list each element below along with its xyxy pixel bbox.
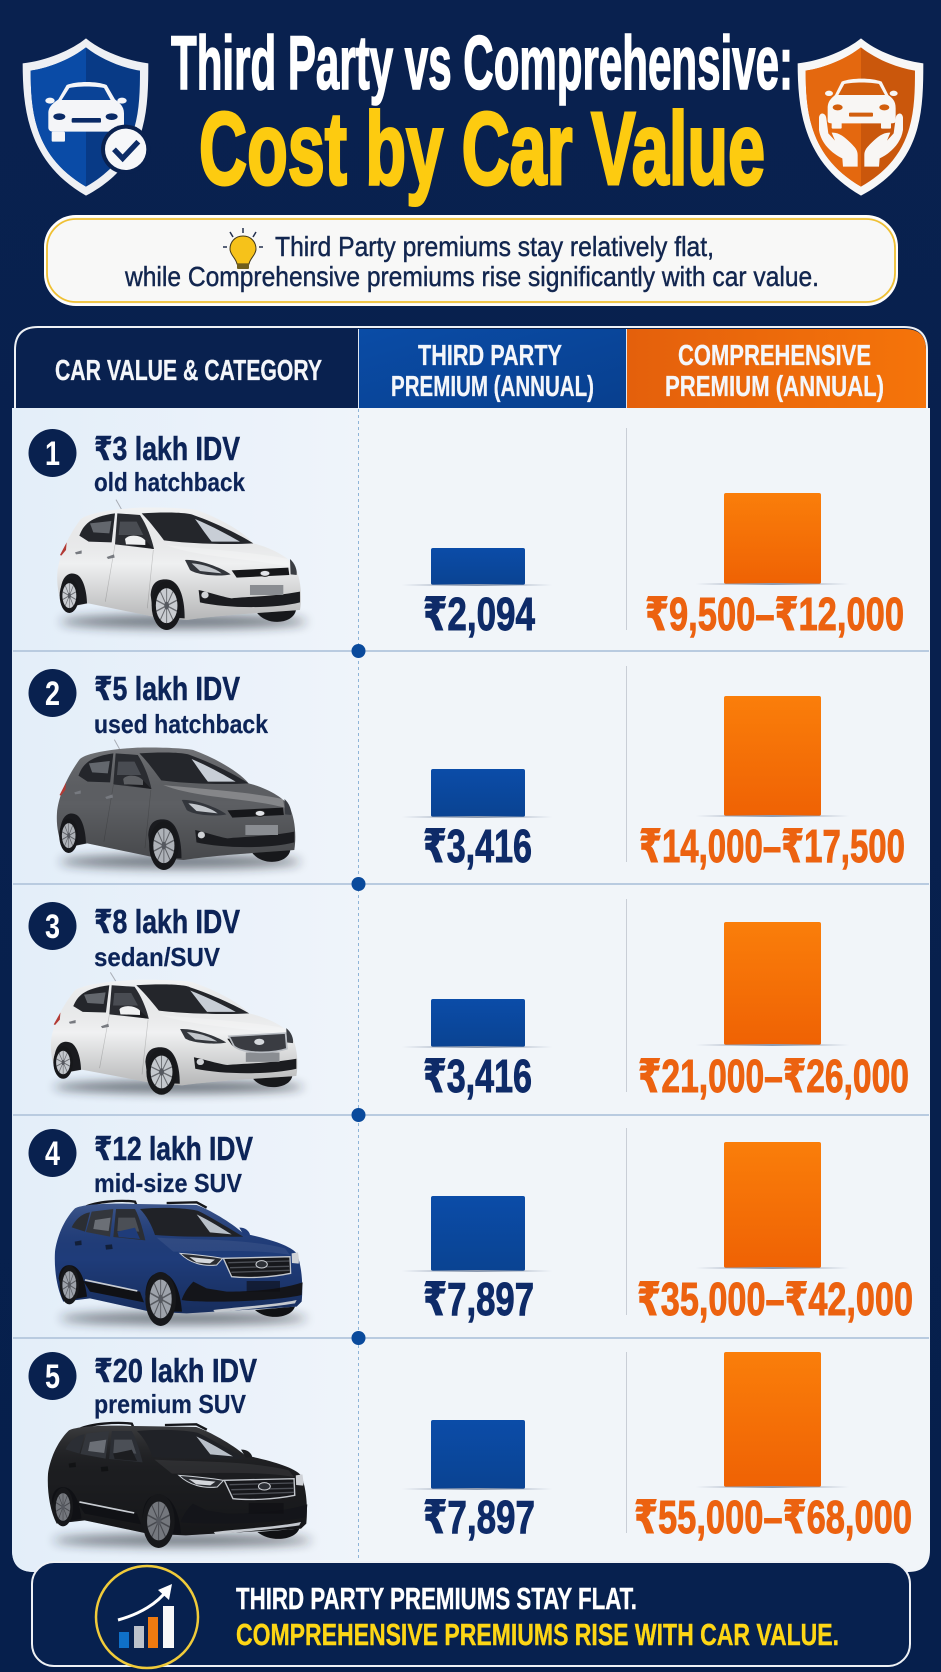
icon: rising bar chart xyxy=(96,1566,198,1668)
badge 1 xyxy=(28,429,76,477)
row 2 comprehensive bar xyxy=(724,696,821,816)
row 1 xyxy=(28,429,904,640)
row 2 category: used hatchback xyxy=(94,709,268,739)
row 5 xyxy=(28,1352,912,1548)
row 1 third party bar xyxy=(431,548,525,585)
row 5 third party amount: ₹7,897 xyxy=(423,1491,535,1543)
row 3 third party bar xyxy=(431,999,525,1047)
icon: orange shield with car and hands xyxy=(798,38,923,196)
row 5 third party bar xyxy=(431,1420,525,1489)
row 2 third party bar xyxy=(431,769,525,817)
badge 4: 4 xyxy=(45,1135,60,1173)
icon: blue shield with car and check xyxy=(23,38,150,196)
callout line 1: Third Party premiums stay relatively flat, xyxy=(275,231,714,262)
footer line 1: THIRD PARTY PREMIUMS STAY FLAT. xyxy=(236,1581,637,1616)
row 3 third party amount: ₹3,416 xyxy=(423,1050,532,1102)
callout line 2: while Comprehensive premiums rise significantly with car value. xyxy=(124,261,819,292)
row 4 value: ₹12 lakh IDV xyxy=(94,1130,253,1167)
row 3 category: sedan/SUV xyxy=(94,942,221,972)
icon: light bulb xyxy=(223,228,263,269)
row 5 value: ₹20 lakh IDV xyxy=(94,1352,257,1389)
header: third party premium: PREMIUM (ANNUAL) xyxy=(391,371,594,403)
badge 1: 1 xyxy=(45,435,60,473)
badge 4 xyxy=(28,1129,76,1177)
row 4 category: mid-size SUV xyxy=(94,1168,243,1198)
row 4 xyxy=(28,1129,913,1326)
row 3 xyxy=(28,902,909,1102)
callout xyxy=(45,216,897,305)
title xyxy=(171,21,793,206)
badge 2 xyxy=(28,669,76,717)
car: grey hatchback xyxy=(57,740,301,870)
row 3 value: ₹8 lakh IDV xyxy=(94,903,240,940)
car: white hatchback xyxy=(57,500,307,630)
row 1 value: ₹3 lakh IDV xyxy=(94,430,240,467)
table body panel xyxy=(12,408,930,1572)
badge 3 xyxy=(28,902,76,950)
row 2 value: ₹5 lakh IDV xyxy=(94,670,240,707)
row 2 third party amount: ₹3,416 xyxy=(423,820,532,872)
row 1 category: old hatchback xyxy=(94,467,245,497)
table header xyxy=(15,327,927,410)
row 1 third party amount: ₹2,094 xyxy=(423,588,535,640)
car: black SUV xyxy=(48,1423,312,1548)
header: third party: THIRD PARTY xyxy=(418,340,562,372)
row 5 category: premium SUV xyxy=(94,1389,247,1419)
row 4 third party amount: ₹7,897 xyxy=(423,1273,534,1325)
row 4 third party bar xyxy=(431,1196,525,1271)
footer banner xyxy=(32,1562,910,1668)
badge 5: 5 xyxy=(45,1358,60,1396)
header: car value: CAR VALUE & CATEGORY xyxy=(55,355,322,387)
car: blue SUV xyxy=(55,1201,307,1326)
car: white sedan xyxy=(51,972,303,1095)
row 4 comprehensive bar xyxy=(724,1142,821,1268)
badge 5 xyxy=(28,1352,76,1400)
header: comprehensive: COMPREHENSIVE xyxy=(678,340,871,372)
row 1 comprehensive bar xyxy=(724,493,821,584)
badge 2: 2 xyxy=(45,675,60,713)
row 2 xyxy=(28,669,905,872)
row 5 comprehensive bar xyxy=(724,1352,821,1487)
row 3 comprehensive bar xyxy=(724,922,821,1045)
badge 3: 3 xyxy=(45,908,60,946)
